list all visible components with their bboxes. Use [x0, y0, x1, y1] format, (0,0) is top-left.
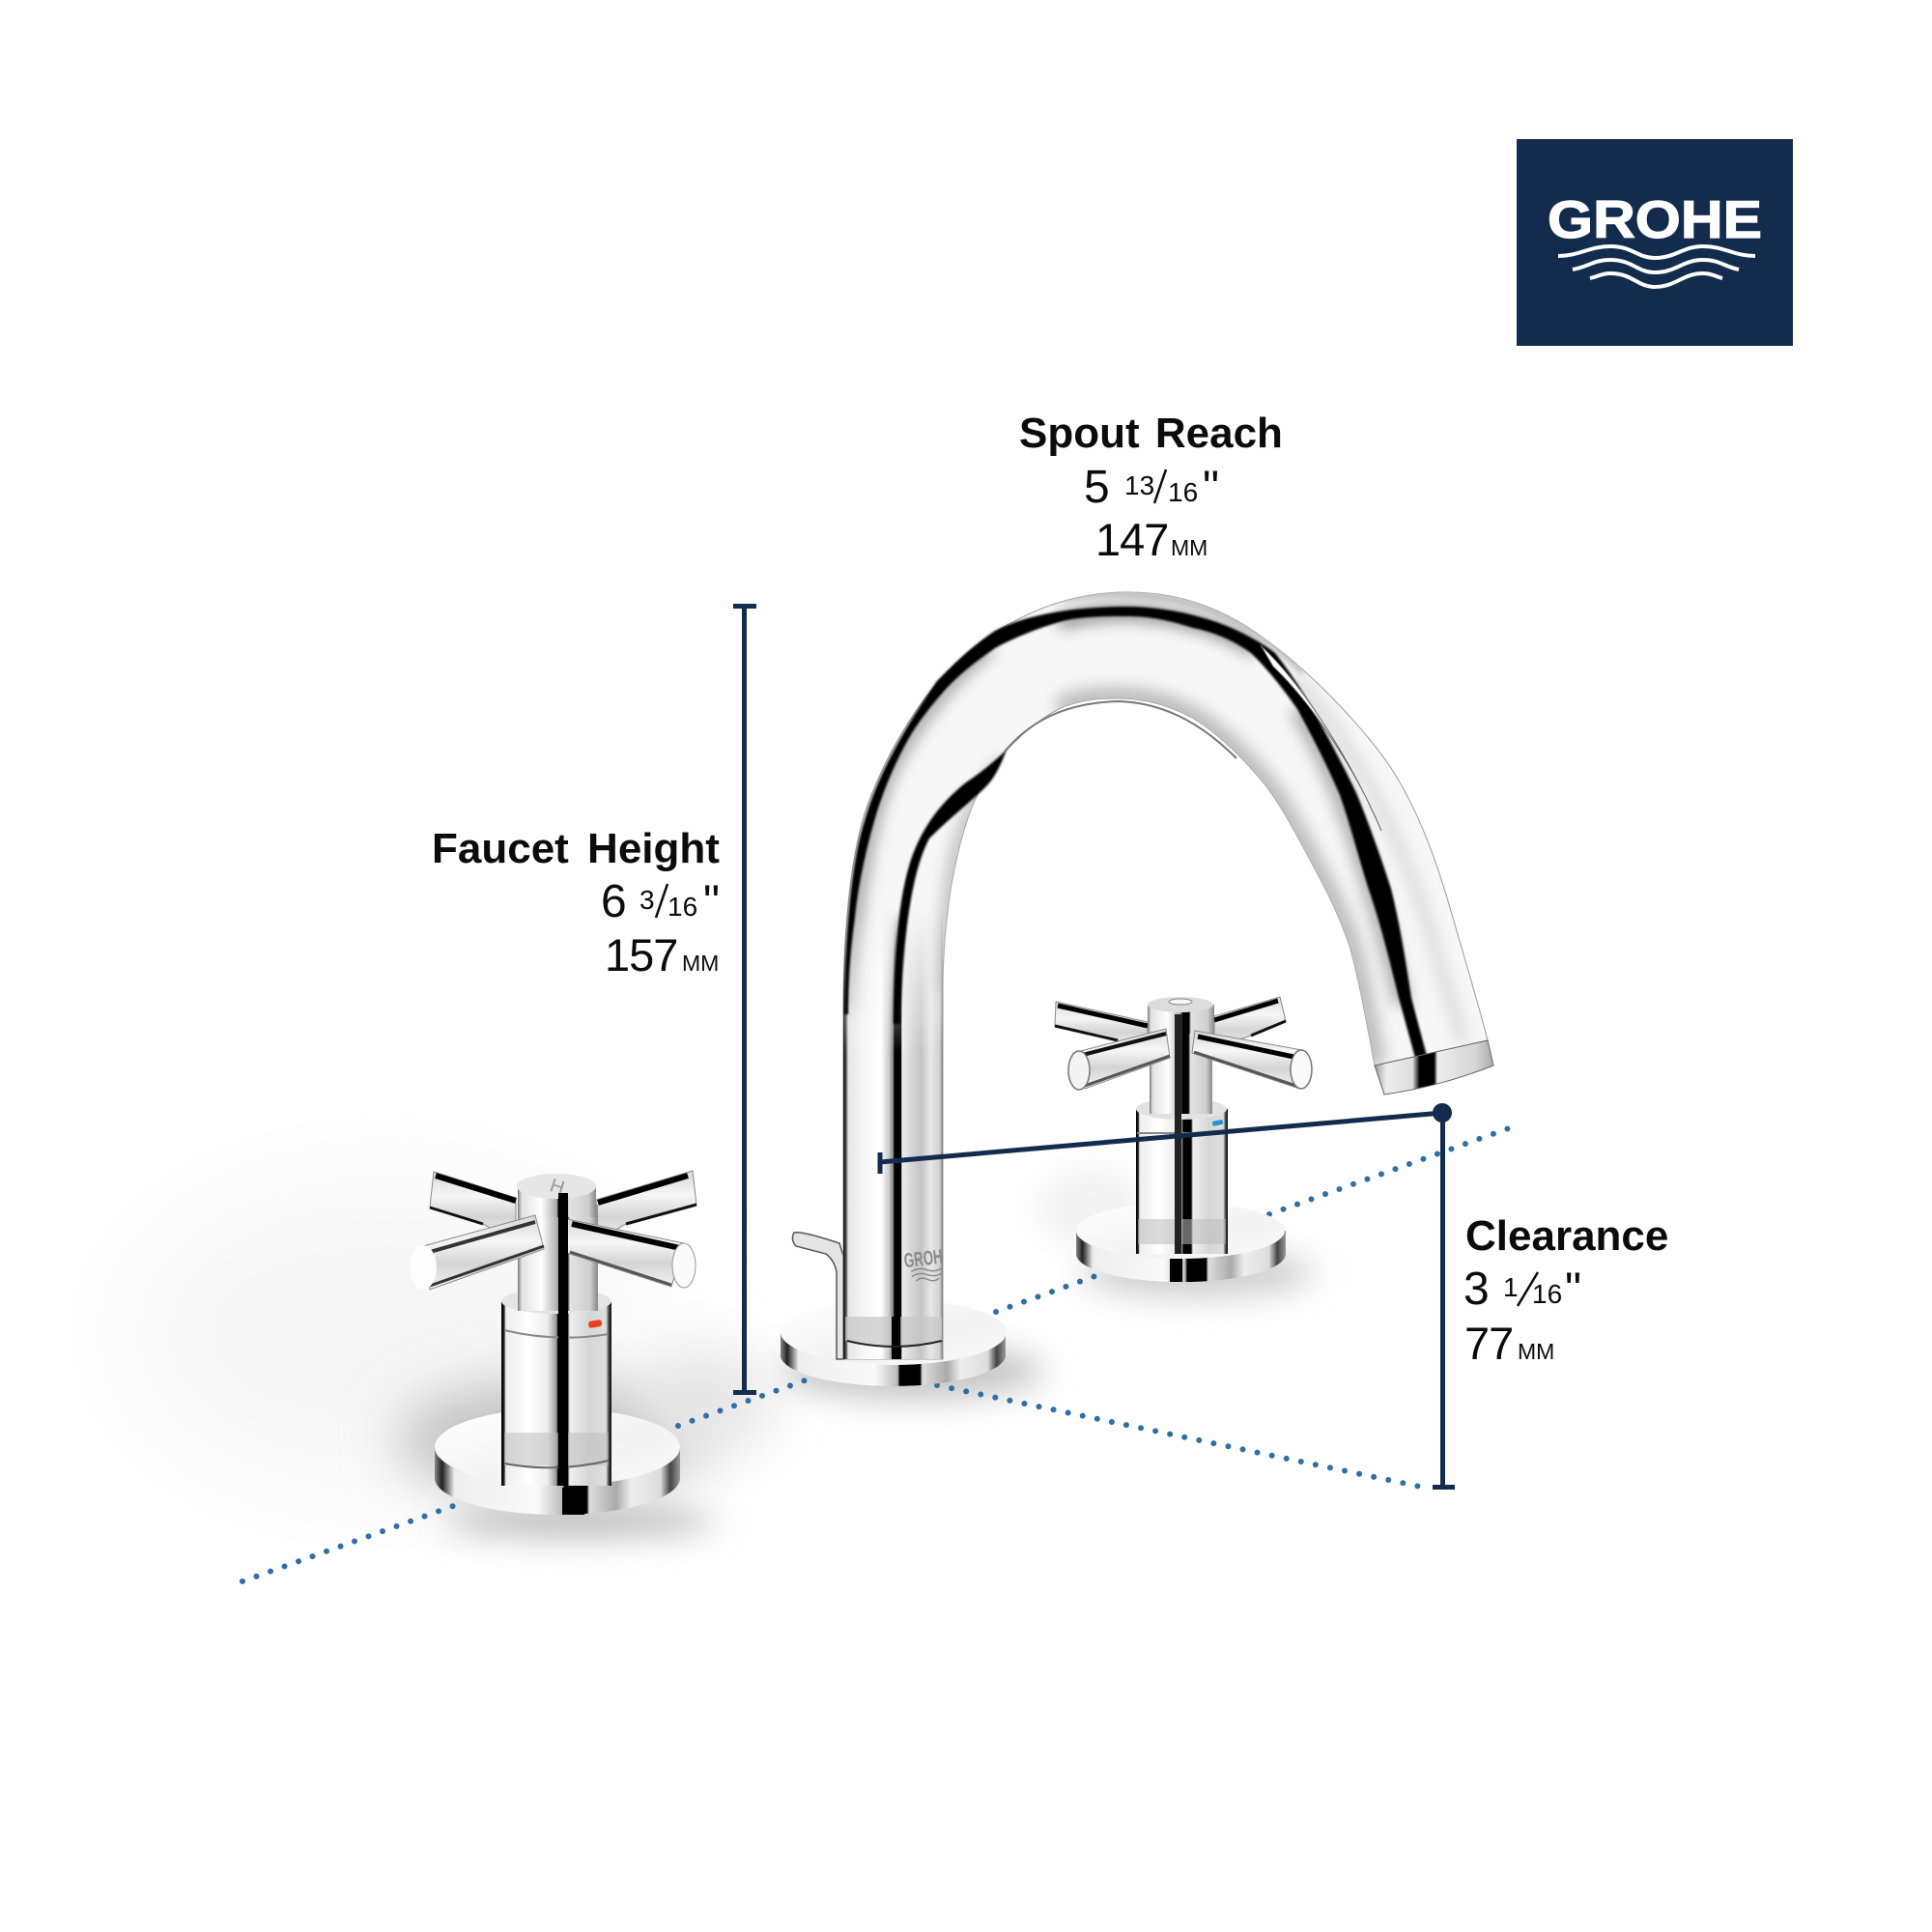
label: spout reach: 16	[1168, 477, 1198, 507]
cap H mark: H	[547, 1175, 567, 1200]
label: clearance: 77	[1464, 1318, 1513, 1369]
center spout base	[781, 1299, 1007, 1386]
label: clearance: 16	[1532, 1279, 1562, 1309]
column logo	[903, 1246, 946, 1284]
left handle base	[435, 1408, 680, 1515]
left handle body	[501, 1289, 611, 1486]
label: spout reach: "	[1203, 463, 1219, 514]
label: spout reach: 5	[1084, 462, 1110, 513]
logo wordmark: GROHE	[1548, 189, 1762, 249]
label: spout reach: 13	[1124, 470, 1154, 500]
label: clearance: Clearance	[1465, 1212, 1668, 1260]
spout	[843, 592, 1493, 1359]
logo: GROHE	[1517, 139, 1793, 346]
aerator	[1375, 1040, 1493, 1094]
left cross handle	[410, 1171, 696, 1515]
column base details	[845, 1317, 942, 1359]
label: clearance: "	[1565, 1264, 1581, 1316]
label: faucet height: 6	[601, 876, 627, 927]
label: spout reach: 147	[1095, 514, 1168, 565]
label: clearance: 3	[1463, 1264, 1490, 1315]
right handle front arms	[1068, 1014, 1312, 1282]
spout body	[843, 592, 1488, 1359]
left handle back arms	[430, 1171, 696, 1241]
right handle body	[1136, 1098, 1228, 1254]
column logo: GROH	[903, 1246, 944, 1272]
blue cold indicator	[1212, 1120, 1223, 1126]
logo waves	[1558, 246, 1755, 287]
label: faucet height: 157	[605, 929, 677, 980]
label: spout reach: Spout Reach	[1019, 410, 1283, 457]
right handle base	[1076, 1203, 1286, 1282]
label: faucet height: MM	[682, 951, 719, 976]
lever	[792, 1233, 843, 1359]
spout inner grey reflection lines	[1005, 701, 1236, 758]
label: faucet height: 3	[639, 885, 655, 915]
left handle front arms	[410, 1193, 696, 1515]
label: faucet height: "	[703, 877, 720, 928]
label: faucet height: Faucet Height	[432, 825, 720, 872]
label: faucet height	[432, 825, 720, 980]
spout inner black reflection	[894, 750, 1007, 1024]
left handle stem and cap	[517, 1174, 598, 1311]
spout main black reflection	[844, 607, 1427, 1058]
dimension: clearance line	[1433, 1113, 1455, 1490]
right cross handle	[1055, 997, 1312, 1282]
label: clearance: MM	[1518, 1339, 1554, 1364]
red hot indicator	[588, 1320, 603, 1328]
right handle stem and cap	[1148, 997, 1214, 1114]
spout shading	[843, 593, 1463, 1359]
label: clearance: 1	[1503, 1272, 1519, 1302]
spout highlight sliver	[1261, 645, 1381, 831]
right handle back arms	[1055, 997, 1286, 1048]
label: faucet height: 16	[668, 892, 697, 922]
dimension: faucet height line	[733, 604, 756, 1395]
dotted floor line: clearance reference	[937, 1385, 1430, 1489]
dimension: spout reach line	[880, 1103, 1452, 1174]
label: clearance	[1463, 1212, 1668, 1369]
dotted floor line: main axis	[242, 1124, 1520, 1581]
soft floor shadows	[135, 1169, 1314, 1537]
label: spout reach: MM	[1171, 535, 1208, 560]
label: spout reach	[1019, 410, 1283, 565]
